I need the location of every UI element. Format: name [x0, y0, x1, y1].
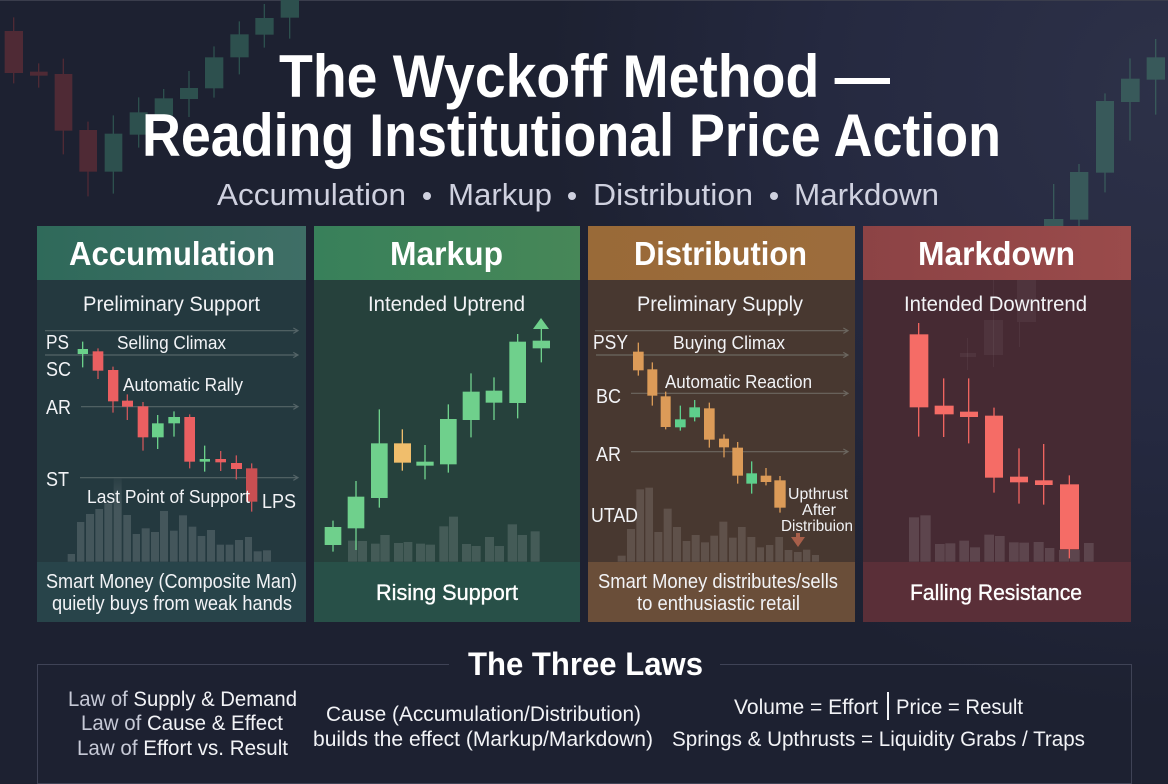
accumulation volume bars — [68, 478, 271, 562]
effort and result note: Price = Result — [896, 696, 1023, 719]
accumulation header — [37, 226, 306, 280]
markup footer: Rising Support — [376, 580, 518, 605]
markup candlesticks — [325, 328, 550, 552]
subtitle: Markdown — [794, 177, 939, 212]
distribution labels: After — [802, 502, 837, 519]
distribution labels: BC — [596, 386, 621, 408]
icon: up arrow — [533, 318, 549, 329]
accumulation footer: quietly buys from weak hands — [52, 593, 292, 615]
laws list: Law of Cause & Effect — [81, 712, 283, 735]
accumulation labels: PS — [46, 332, 69, 354]
cause and effect note: Cause (Accumulation/Distribution) — [326, 703, 641, 726]
markup header: Markup — [390, 235, 503, 272]
distribution header: Distribution — [634, 235, 807, 272]
markup volume bars — [348, 517, 540, 562]
distribution labels: PSY — [593, 332, 628, 354]
accumulation labels — [46, 332, 296, 513]
laws list: Law of Supply & Demand — [68, 688, 297, 711]
panel: accumulation — [37, 226, 306, 622]
accumulation header: Accumulation — [69, 235, 275, 272]
distribution volume bars — [618, 488, 819, 562]
markdown candlesticks — [910, 323, 1079, 558]
effort and result note — [672, 692, 1085, 751]
markdown subheading: Intended Downtrend — [904, 293, 1087, 316]
accumulation labels: Automatic Rally — [123, 375, 243, 395]
markdown footer: Falling Resistance — [910, 580, 1082, 605]
ghost background candles — [960, 280, 1036, 370]
distribution footer: to enthusiastic retail — [637, 593, 800, 615]
accumulation level arrows — [45, 328, 298, 480]
laws list: Law of Effort vs. Result — [77, 737, 288, 760]
distribution labels: UTAD — [591, 505, 638, 527]
panel: distribution — [588, 226, 855, 622]
subtitle: Markup — [448, 177, 552, 212]
distribution candlesticks — [633, 343, 786, 513]
background candlesticks: right — [1044, 39, 1165, 227]
distribution labels: Upthrust — [788, 486, 849, 503]
accumulation subheading: Preliminary Support — [83, 293, 260, 316]
subtitle: Distribution — [593, 177, 753, 212]
distribution level arrows — [595, 328, 848, 454]
panel: markdown — [863, 226, 1131, 622]
accumulation labels: Selling Climax — [117, 333, 226, 353]
distribution labels: Distribuion — [781, 518, 853, 535]
markup subheading: Intended Uptrend — [368, 293, 525, 316]
distribution header — [588, 226, 855, 280]
distribution footer: Smart Money distributes/sells — [598, 571, 838, 593]
subtitle: Accumulation — [217, 177, 406, 212]
icon: down arrow — [791, 533, 805, 547]
accumulation labels: AR — [46, 397, 71, 419]
effort and result note: Volume = Effort — [734, 696, 878, 719]
background candlesticks: left — [5, 0, 299, 196]
accumulation footer — [37, 562, 306, 622]
panel: the three laws — [38, 646, 1132, 784]
accumulation labels: LPS — [262, 491, 296, 513]
laws heading: The Three Laws — [468, 646, 703, 682]
title: Reading Institutional Price Action — [142, 102, 1001, 169]
title — [142, 43, 1001, 169]
effort and result note: Springs & Upthrusts = Liquidity Grabs / Traps — [672, 728, 1085, 751]
accumulation footer: Smart Money (Composite Man) — [46, 571, 297, 593]
distribution labels: Buying Climax — [673, 333, 785, 353]
laws list — [68, 688, 297, 760]
accumulation labels: SC — [46, 359, 71, 381]
subtitle — [217, 177, 939, 212]
cause and effect note — [313, 703, 653, 751]
markdown volume bars — [909, 515, 1094, 562]
cause and effect note: builds the effect (Markup/Markdown) — [313, 728, 653, 751]
markdown footer — [863, 562, 1131, 622]
markdown header — [863, 226, 1131, 280]
distribution footer — [588, 562, 855, 622]
accumulation candlesticks — [78, 342, 257, 512]
distribution subheading: Preliminary Supply — [637, 293, 803, 316]
title: The Wyckoff Method — — [279, 43, 890, 110]
markup header — [314, 226, 580, 280]
panel: markup — [314, 226, 580, 622]
markdown header: Markdown — [918, 235, 1075, 272]
distribution labels — [591, 332, 853, 535]
distribution labels: Automatic Reaction — [665, 372, 812, 392]
markup footer — [314, 562, 580, 622]
accumulation labels: ST — [46, 469, 69, 491]
accumulation labels: Last Point of Support — [87, 486, 250, 507]
distribution labels: AR — [596, 444, 621, 466]
